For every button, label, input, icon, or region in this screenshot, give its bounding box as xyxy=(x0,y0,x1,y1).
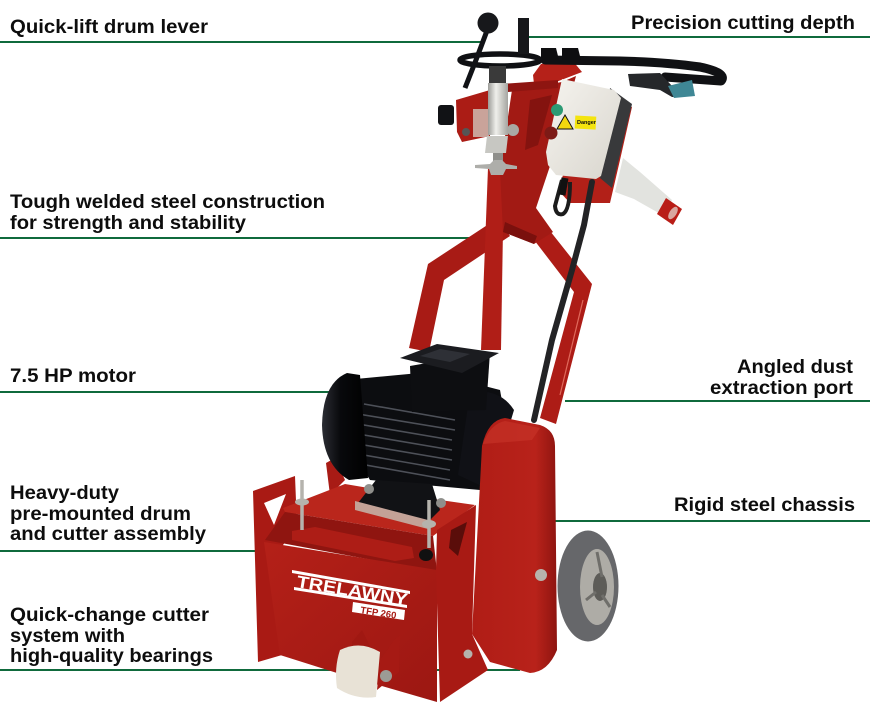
side wall xyxy=(436,505,488,702)
leader line: Precision cutting depth xyxy=(528,36,870,38)
label: Quick-change cutter system with high-quality bearings: Quick-change cutter xyxy=(10,604,209,626)
illustration: floor planer machine xyxy=(253,12,722,702)
leader line: Rigid steel chassis xyxy=(552,520,870,522)
label: Angled dust extraction port xyxy=(710,356,854,399)
motor xyxy=(295,344,514,548)
main face xyxy=(264,542,437,702)
top flap xyxy=(292,527,414,561)
drum lift block xyxy=(438,90,490,142)
handle cable and switch xyxy=(628,73,693,97)
label: Angled dust extraction port: Angled dust xyxy=(737,356,854,378)
silver lift cylinder xyxy=(475,66,519,175)
wiring loop xyxy=(555,180,570,214)
label: Tough welded steel construction: Tough welded steel construction xyxy=(10,191,325,213)
top bracket xyxy=(533,60,582,84)
left brace xyxy=(409,218,510,352)
motor rear cap xyxy=(322,373,368,480)
rear frame tabs xyxy=(326,458,345,495)
chassis side plate xyxy=(464,418,557,673)
depth post xyxy=(518,18,529,54)
motor foot xyxy=(358,480,440,522)
leader line: Quick-lift drum lever xyxy=(0,41,482,43)
label: Quick-change cutter system with high-quality bearings: system with xyxy=(10,625,125,647)
label: Heavy-duty pre-mounted drum and cutter assembly: and cutter assembly xyxy=(10,523,206,545)
handwheel ring xyxy=(460,54,540,66)
main column xyxy=(500,76,576,244)
logo: TRELAWNY TFP 260 xyxy=(292,570,410,622)
upper frame xyxy=(409,60,592,424)
left handle flange and lower side xyxy=(253,476,297,662)
label: Tough welded steel construction: for strength and stability xyxy=(10,212,246,234)
label: Angled dust extraction port: extraction port xyxy=(710,377,854,399)
label: 7.5 HP motor: 7.5 HP motor xyxy=(10,365,136,387)
warning triangle xyxy=(557,115,573,129)
danger sticker xyxy=(575,115,596,130)
terminal lid xyxy=(400,344,499,373)
lift lever and knob xyxy=(465,12,498,88)
logo: TRELAWNY TFP 260: TFP 260 xyxy=(360,605,397,622)
silver plate xyxy=(355,501,428,529)
electrical box xyxy=(544,79,632,188)
label: Quick-change cutter system with high-quality bearings: high-quality bearings xyxy=(10,645,213,667)
leader line: 7.5 HP motor xyxy=(0,391,340,393)
cables from box xyxy=(534,182,592,420)
deck studs xyxy=(302,480,429,548)
leader line: Angled dust extraction port xyxy=(565,400,870,402)
handlebar xyxy=(545,60,722,81)
label: Quick-change cutter system with high-quality bearings xyxy=(10,604,213,667)
under-deck recess xyxy=(265,512,437,572)
label: Precision cutting depth: Precision cutting depth xyxy=(631,12,855,34)
electrical box: Danger xyxy=(577,120,597,126)
right brace xyxy=(528,212,592,424)
label: Heavy-duty pre-mounted drum and cutter assembly: Heavy-duty xyxy=(10,482,119,504)
chassis box xyxy=(253,476,488,702)
leader line: Heavy-duty drum assembly xyxy=(0,550,258,552)
leader line: Quick-change cutter system xyxy=(0,669,520,671)
label: Tough welded steel construction xyxy=(10,191,325,234)
label: Heavy-duty pre-mounted drum and cutter assembly: pre-mounted drum xyxy=(10,503,191,525)
rear red mounting plate xyxy=(558,95,632,203)
leader line: Tough welded steel construction xyxy=(0,237,470,239)
front roller xyxy=(336,630,400,698)
central upright xyxy=(481,168,504,350)
label: Rigid steel chassis: Rigid steel chassis xyxy=(674,494,855,516)
label: Heavy-duty pre-mounted drum and cutter assembly xyxy=(10,482,206,545)
motor front bell xyxy=(458,391,514,490)
rear wheel xyxy=(558,530,618,642)
plug xyxy=(615,158,682,225)
logo: TRELAWNY TFP 260: TRELAWNY xyxy=(295,572,410,610)
terminal box xyxy=(410,352,490,412)
label: Quick-lift drum lever: Quick-lift drum lever xyxy=(10,16,208,38)
top deck xyxy=(283,484,475,536)
